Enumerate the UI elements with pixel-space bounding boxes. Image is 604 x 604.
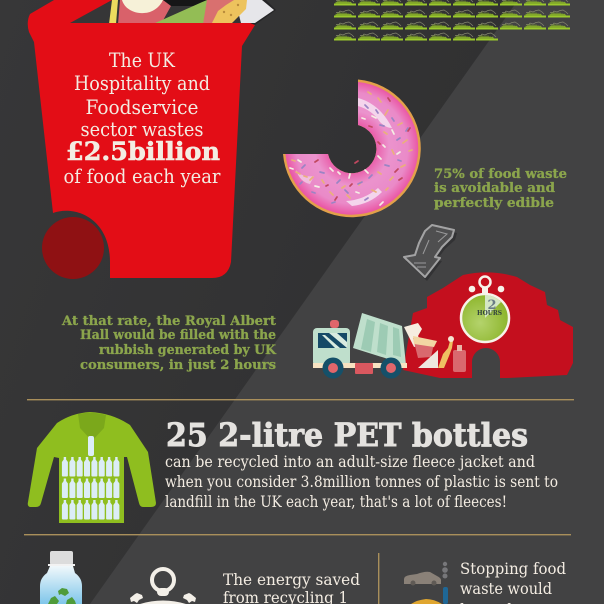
text: stopping food waste	[460, 560, 566, 604]
text: Royal Albert Hall comparison: rubbish generated by UK	[99, 343, 277, 358]
bin text: Hospitality and	[74, 71, 210, 95]
icon: recyclable water bottle	[40, 551, 82, 604]
stopwatch: HOURS	[477, 309, 502, 317]
bin text: The UK	[109, 48, 176, 72]
bin wheel	[42, 217, 104, 279]
text: Royal Albert Hall comparison: At that rate, the Royal Albert	[61, 314, 276, 329]
text: 75% of food waste	[434, 167, 567, 211]
text: PET bottle recycling: when you consider 3.8million tonnes of plastic is sent to	[165, 473, 558, 491]
stopwatch	[461, 276, 509, 342]
text: 75% of food waste: 75% of food waste	[434, 167, 567, 182]
stopwatch: 2	[487, 298, 497, 313]
icon: rubbish truck	[313, 313, 407, 378]
icon: three-quarter doughnut	[283, 80, 421, 217]
bin text: of food each year	[64, 164, 221, 188]
Royal Albert Hall silhouette	[403, 272, 573, 378]
text: energy saved	[223, 571, 360, 604]
text: Royal Albert Hall comparison: Hall would be filled with the	[80, 328, 276, 343]
text: 75% of food waste: perfectly edible	[434, 196, 554, 211]
panel: Royal Albert Hall with stopwatch	[313, 272, 573, 378]
text: stopping food waste: waste would	[460, 580, 552, 598]
text: PET bottle recycling: can be recycled into an adult-size fleece jacket and	[165, 453, 535, 471]
bottles on jacket	[62, 457, 119, 520]
arrow: twisted grey arrow	[404, 225, 457, 281]
panel: fleece jacket made of bottles	[28, 412, 558, 523]
icon grid: rows of green landfill icons	[334, 0, 570, 40]
icon: yellow car with exhaust	[411, 587, 448, 604]
text: stopping food waste: Stopping food	[460, 560, 566, 578]
icon: rubbish pile	[404, 323, 466, 372]
heading: 25 2-litre PET bottles: 25 2-litre PET bottles	[166, 416, 528, 454]
icon: grey car with exhaust	[404, 562, 448, 586]
text: 75% of food waste: is avoidable and	[434, 181, 555, 196]
text: PET bottle recycling	[165, 453, 558, 511]
food overflowing from bin	[109, 0, 276, 25]
bin text	[64, 48, 221, 188]
bin text: sector wastes	[80, 117, 204, 141]
bin body	[28, 0, 255, 278]
bin text: Foodservice	[86, 95, 198, 119]
bin text: £2.5billion	[66, 137, 220, 166]
text: Royal Albert Hall comparison: consumers, in just 2 hours	[80, 358, 276, 373]
text: PET bottle recycling: landfill in the UK each year, that's a lot of fleeces!	[165, 493, 507, 511]
text: Royal Albert Hall comparison	[61, 314, 277, 373]
text: energy saved: The energy saved	[223, 571, 360, 589]
panel: red wheelie bin	[28, 0, 276, 279]
icon: green fleece jacket	[28, 412, 156, 523]
icon: white stopwatch	[130, 569, 196, 604]
